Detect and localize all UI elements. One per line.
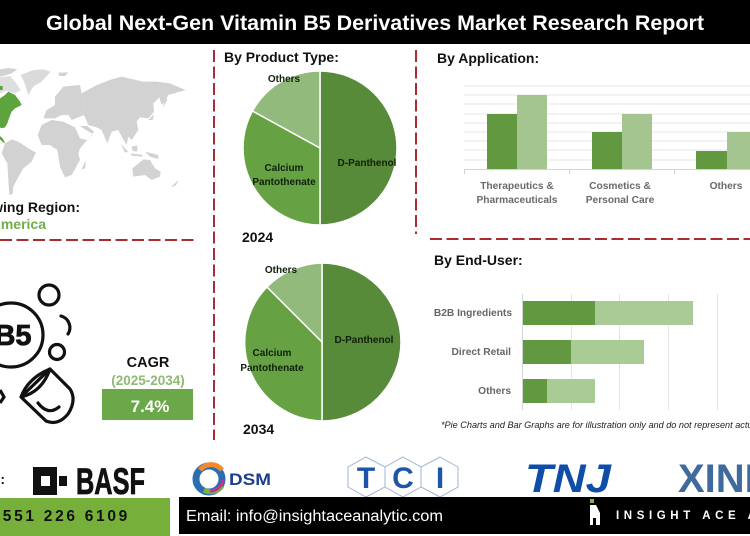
column chart: application: Cosmetics &	[589, 181, 651, 192]
column chart: application: Pharmaceuticals	[477, 195, 558, 206]
world map	[0, 68, 186, 195]
column chart: application	[464, 86, 750, 206]
email and brand bar	[179, 497, 750, 534]
stacked bar chart: end-user: Others	[478, 386, 511, 397]
logo: DSM	[196, 465, 271, 492]
stacked bar chart: end-user: Direct Retail	[452, 347, 511, 358]
CAGR block: 7.4%	[131, 397, 169, 416]
pie chart 2034	[240, 263, 401, 421]
fastest growing region label	[0, 199, 80, 232]
heading: by application: By Application:	[437, 50, 539, 66]
heading: by end-user: By End-User:	[434, 252, 523, 268]
pie chart 2024: Pantothenate	[252, 177, 316, 188]
pie chart 2034: Others	[265, 265, 298, 276]
pie chart 2034: Calcium	[253, 348, 292, 359]
pie chart 2024: D-Panthenol	[338, 158, 397, 169]
phone bar	[0, 498, 170, 536]
logo: BASF: BASF	[76, 461, 145, 502]
pie chart 2034: Pantothenate	[240, 363, 304, 374]
CAGR block: (2025-2034)	[111, 373, 185, 388]
logo: Insight Ace Analytic	[590, 499, 750, 525]
logo: BASF	[33, 461, 145, 502]
icon: vitamin B5	[0, 285, 73, 422]
pie chart 2034: D-Panthenol	[335, 335, 394, 346]
logo: TCI: I	[436, 462, 444, 495]
heading: by product type: By Product Type:	[224, 49, 339, 65]
year label 2034: 2034	[243, 421, 274, 437]
column chart: application: Therapeutics &	[480, 181, 554, 192]
column chart: application: Others	[710, 181, 743, 192]
title banner: Global Next-Gen Vitamin B5 Derivatives Market Research Report	[46, 11, 704, 35]
pie chart 2024: Calcium	[265, 163, 304, 174]
year label 2024: 2024	[242, 229, 273, 245]
email and brand bar: Email: info@insightaceanalytic.com	[186, 508, 443, 525]
logo: TNJ: TNJ	[525, 457, 612, 501]
CAGR block: CAGR	[127, 355, 170, 371]
title banner	[0, 0, 750, 44]
stacked bar chart: end-user: B2B Ingredients	[434, 308, 512, 319]
logo: TCI	[348, 457, 458, 497]
pie chart 2024: Others	[268, 74, 301, 85]
logo: TCI: T	[357, 462, 375, 495]
column chart: application: Personal Care	[586, 195, 655, 206]
logo: TCI: C	[392, 462, 414, 495]
pie chart 2024	[243, 71, 397, 225]
CAGR block	[102, 355, 193, 420]
highlighted region: North America	[0, 86, 22, 143]
logo: DSM: DSM	[229, 470, 271, 489]
stacked bar chart: end-user	[434, 294, 718, 410]
